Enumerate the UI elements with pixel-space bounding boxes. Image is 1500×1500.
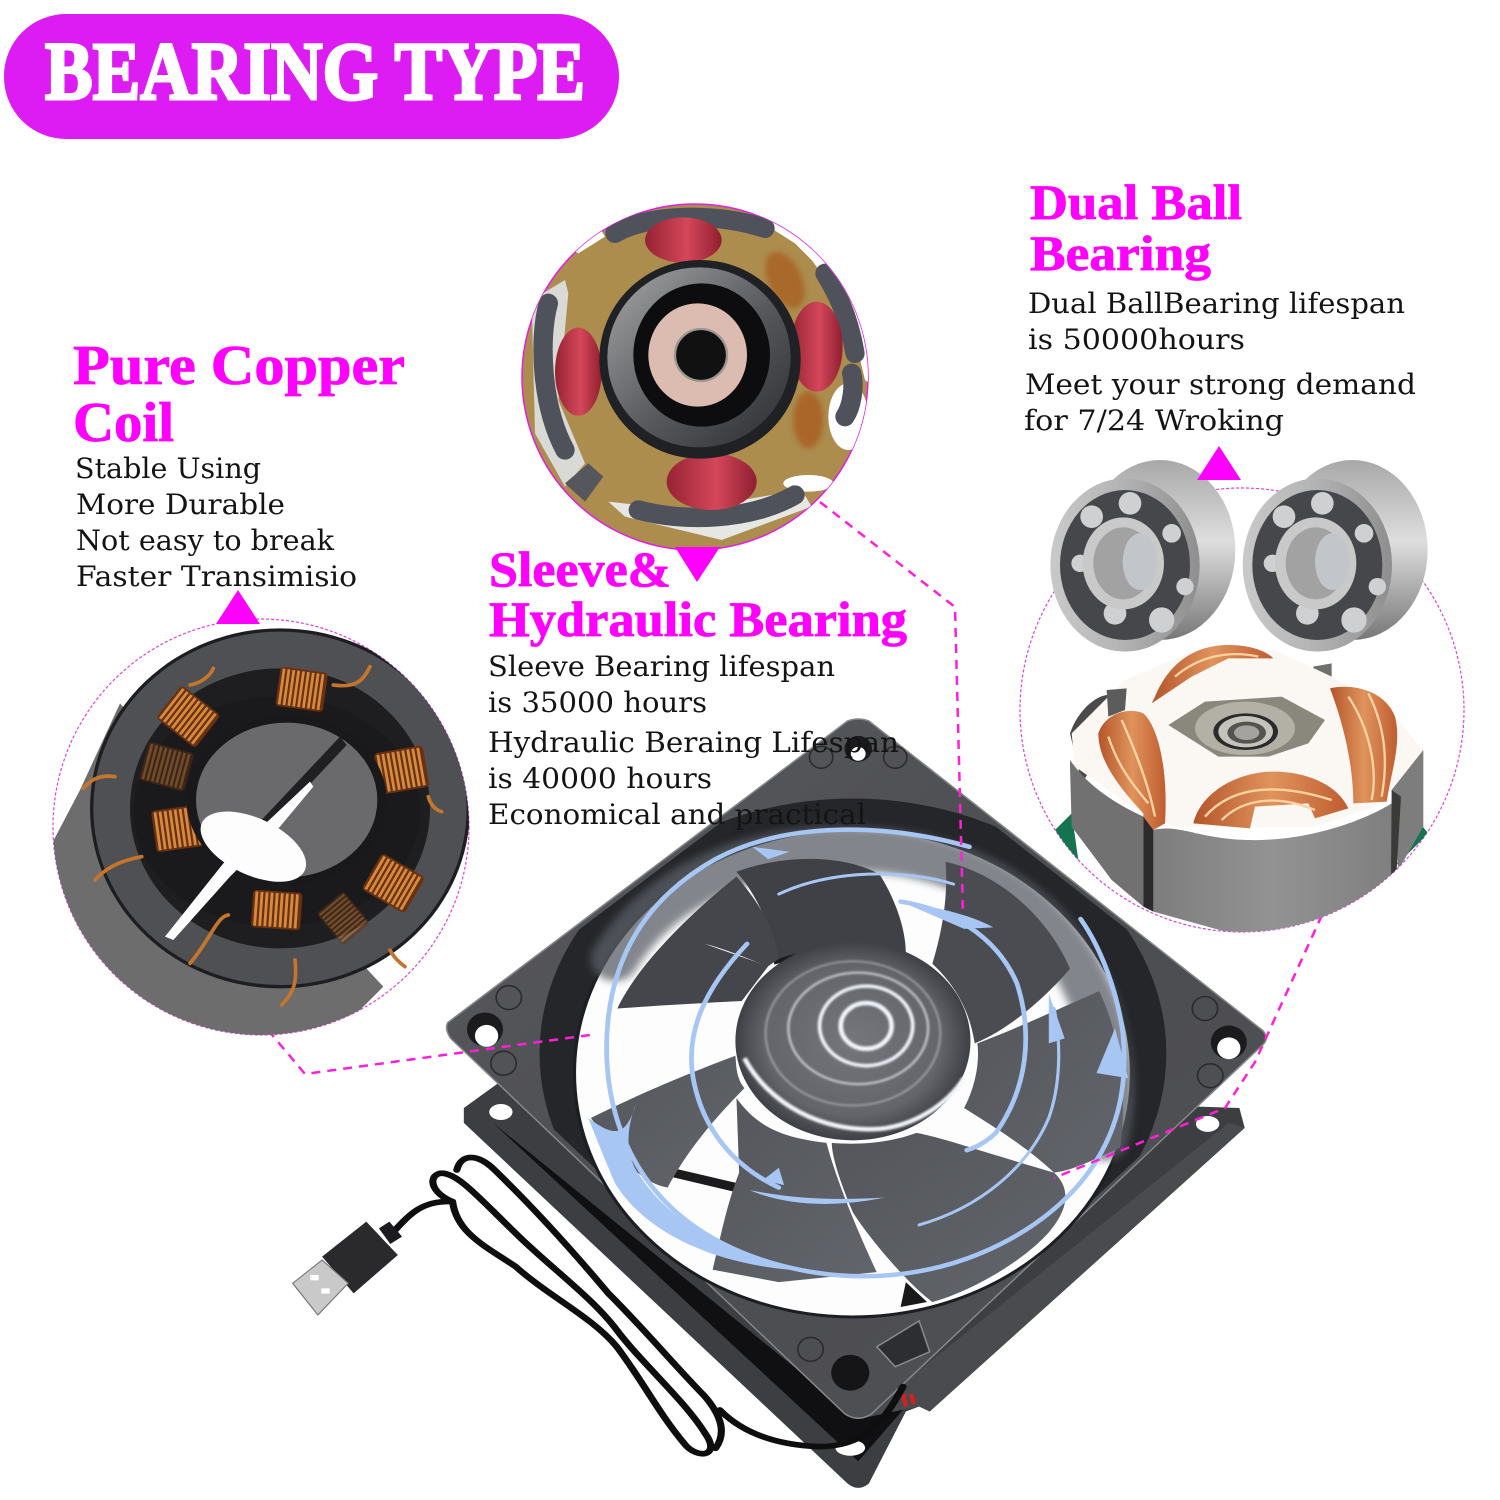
title banner: BEARING TYPE	[45, 25, 585, 117]
central rotor	[187, 760, 386, 846]
text: dual ball details: is 50000hours	[1028, 323, 1245, 356]
copper windings	[139, 666, 430, 946]
heading: pure copper coil	[73, 335, 405, 454]
heading: sleeve and hydraulic bearing	[489, 541, 907, 647]
fan connector	[877, 1321, 930, 1367]
fan blades	[591, 859, 1123, 1302]
text: copper coil benefits: Stable Using	[75, 452, 261, 485]
twin ball bearings	[1050, 460, 1428, 652]
panel: sleeve and hydraulic bearing photo	[522, 204, 875, 550]
USB plug	[293, 1222, 402, 1315]
stator blocks	[1153, 803, 1392, 933]
white bobbin	[1072, 650, 1423, 827]
stator corner	[565, 463, 603, 502]
rear fan frame	[464, 1083, 1245, 1488]
bearing seat	[1168, 697, 1325, 757]
mounting holes	[467, 736, 1247, 1391]
heading: dual ball bearing	[1030, 174, 1242, 281]
text: dual ball details	[1024, 287, 1416, 437]
grey spin haze	[615, 849, 1110, 1138]
pointer: dual ball bearing	[1197, 446, 1241, 480]
title banner	[4, 14, 619, 139]
heading: dual ball bearing: Dual Ball	[1030, 174, 1242, 230]
wire leads	[83, 667, 442, 1005]
front fan frame	[447, 719, 1266, 1418]
text: sleeve and hydraulic details: Economical and practical	[488, 798, 866, 831]
fan assembly	[447, 719, 1266, 1488]
red wires	[903, 1394, 914, 1406]
heading: pure copper coil: Pure Copper	[73, 335, 405, 397]
text: sleeve and hydraulic details: Hydraulic Beraing Lifespan	[488, 726, 899, 759]
bearing centre	[599, 260, 801, 459]
text: sleeve and hydraulic details: Sleeve Bearing lifespan	[488, 650, 835, 683]
text: sleeve and hydraulic details	[488, 650, 899, 831]
text: copper coil benefits	[75, 452, 357, 593]
airflow arrows	[588, 830, 1128, 1276]
text: copper coil benefits: Faster Transimisio	[76, 560, 357, 593]
rotor slot	[260, 737, 347, 827]
text: copper coil benefits: More Durable	[76, 488, 285, 521]
frame recess	[540, 798, 1166, 1200]
pointer: sleeve bearing	[675, 547, 720, 582]
USB cable	[293, 1157, 903, 1454]
panel: dual ball bearing photo	[1020, 460, 1464, 933]
heading: sleeve and hydraulic bearing: Hydraulic Bearing	[489, 591, 907, 647]
motor body	[43, 703, 383, 1053]
connector lines	[268, 502, 1322, 1178]
heading: sleeve and hydraulic bearing: Sleeve&	[489, 541, 671, 597]
bottom opening highlight	[901, 1282, 927, 1307]
stator teeth	[543, 217, 855, 517]
white cutouts	[532, 220, 875, 540]
stator back	[1070, 694, 1108, 778]
fan spokes	[673, 899, 821, 1188]
stator ring	[90, 628, 470, 988]
heading: pure copper coil: Coil	[73, 392, 174, 454]
fan hub	[735, 941, 970, 1140]
fan opening	[574, 829, 1131, 1317]
text: dual ball details: Meet your strong demand	[1025, 368, 1416, 401]
heading: dual ball bearing: Bearing	[1030, 225, 1211, 281]
text: copper coil benefits: Not easy to break	[76, 524, 335, 557]
text: sleeve and hydraulic details: is 40000 hours	[488, 762, 712, 795]
pcb stains	[762, 250, 808, 310]
rotor highlight	[165, 782, 317, 940]
copper windings	[1098, 645, 1397, 907]
text: sleeve and hydraulic details: is 35000 hours	[488, 686, 707, 719]
pointer: copper coil	[216, 590, 260, 624]
copper-red windings	[555, 217, 843, 510]
panel: pure copper coil photo	[43, 619, 470, 1053]
pcb corners	[1055, 814, 1428, 865]
text: dual ball details: Dual BallBearing lifespan	[1028, 287, 1405, 320]
text: dual ball details: for 7/24 Wroking	[1024, 404, 1284, 437]
